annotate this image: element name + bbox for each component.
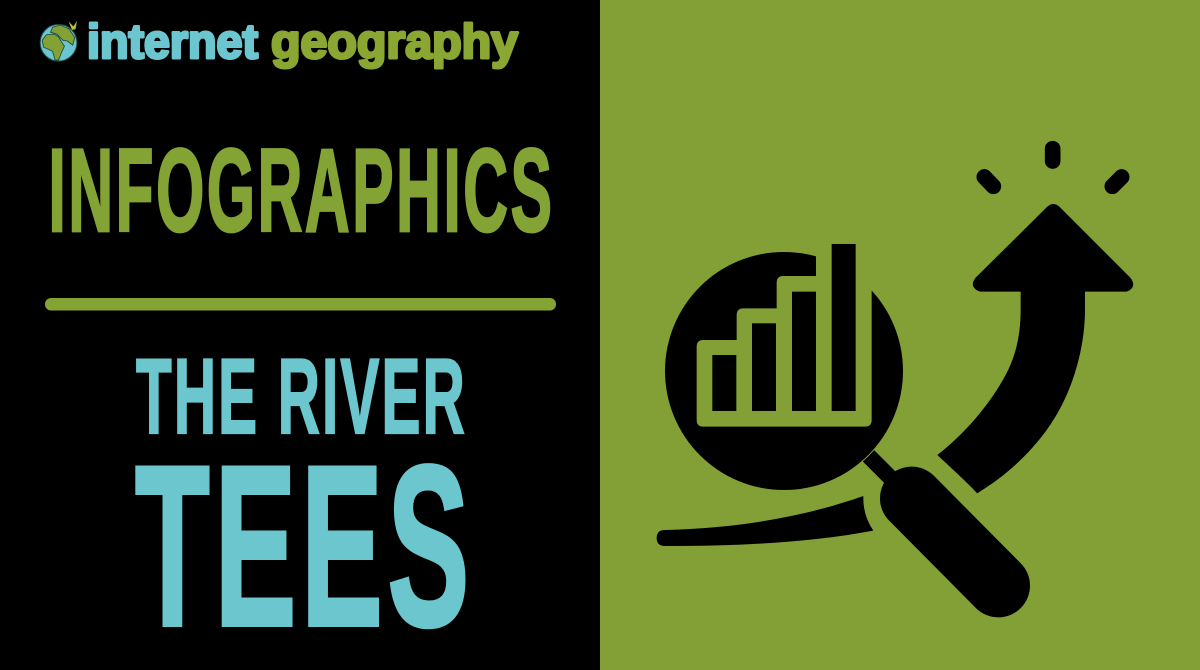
magnifier lens [664,243,904,491]
magnifier handle [868,456,998,586]
wordmark: geography: geography [271,16,518,69]
chart outline [697,243,872,427]
divider bar [45,298,556,310]
icon: rays above arrow [984,149,1122,186]
logo: internet geography [40,16,518,69]
icon: magnifying glass over bar chart with rising arrow [657,149,1133,586]
arrow tail: lower curve [657,496,873,546]
arrow: rising curve [937,204,1133,493]
heading: infographics: INFOGRAPHICS [48,125,554,257]
icon: globe [40,21,77,61]
wordmark: internet: internet [87,16,258,69]
bar chart [712,244,856,411]
heading: the river: THE RIVER [136,336,467,456]
heading: tees: TEES [135,418,474,670]
